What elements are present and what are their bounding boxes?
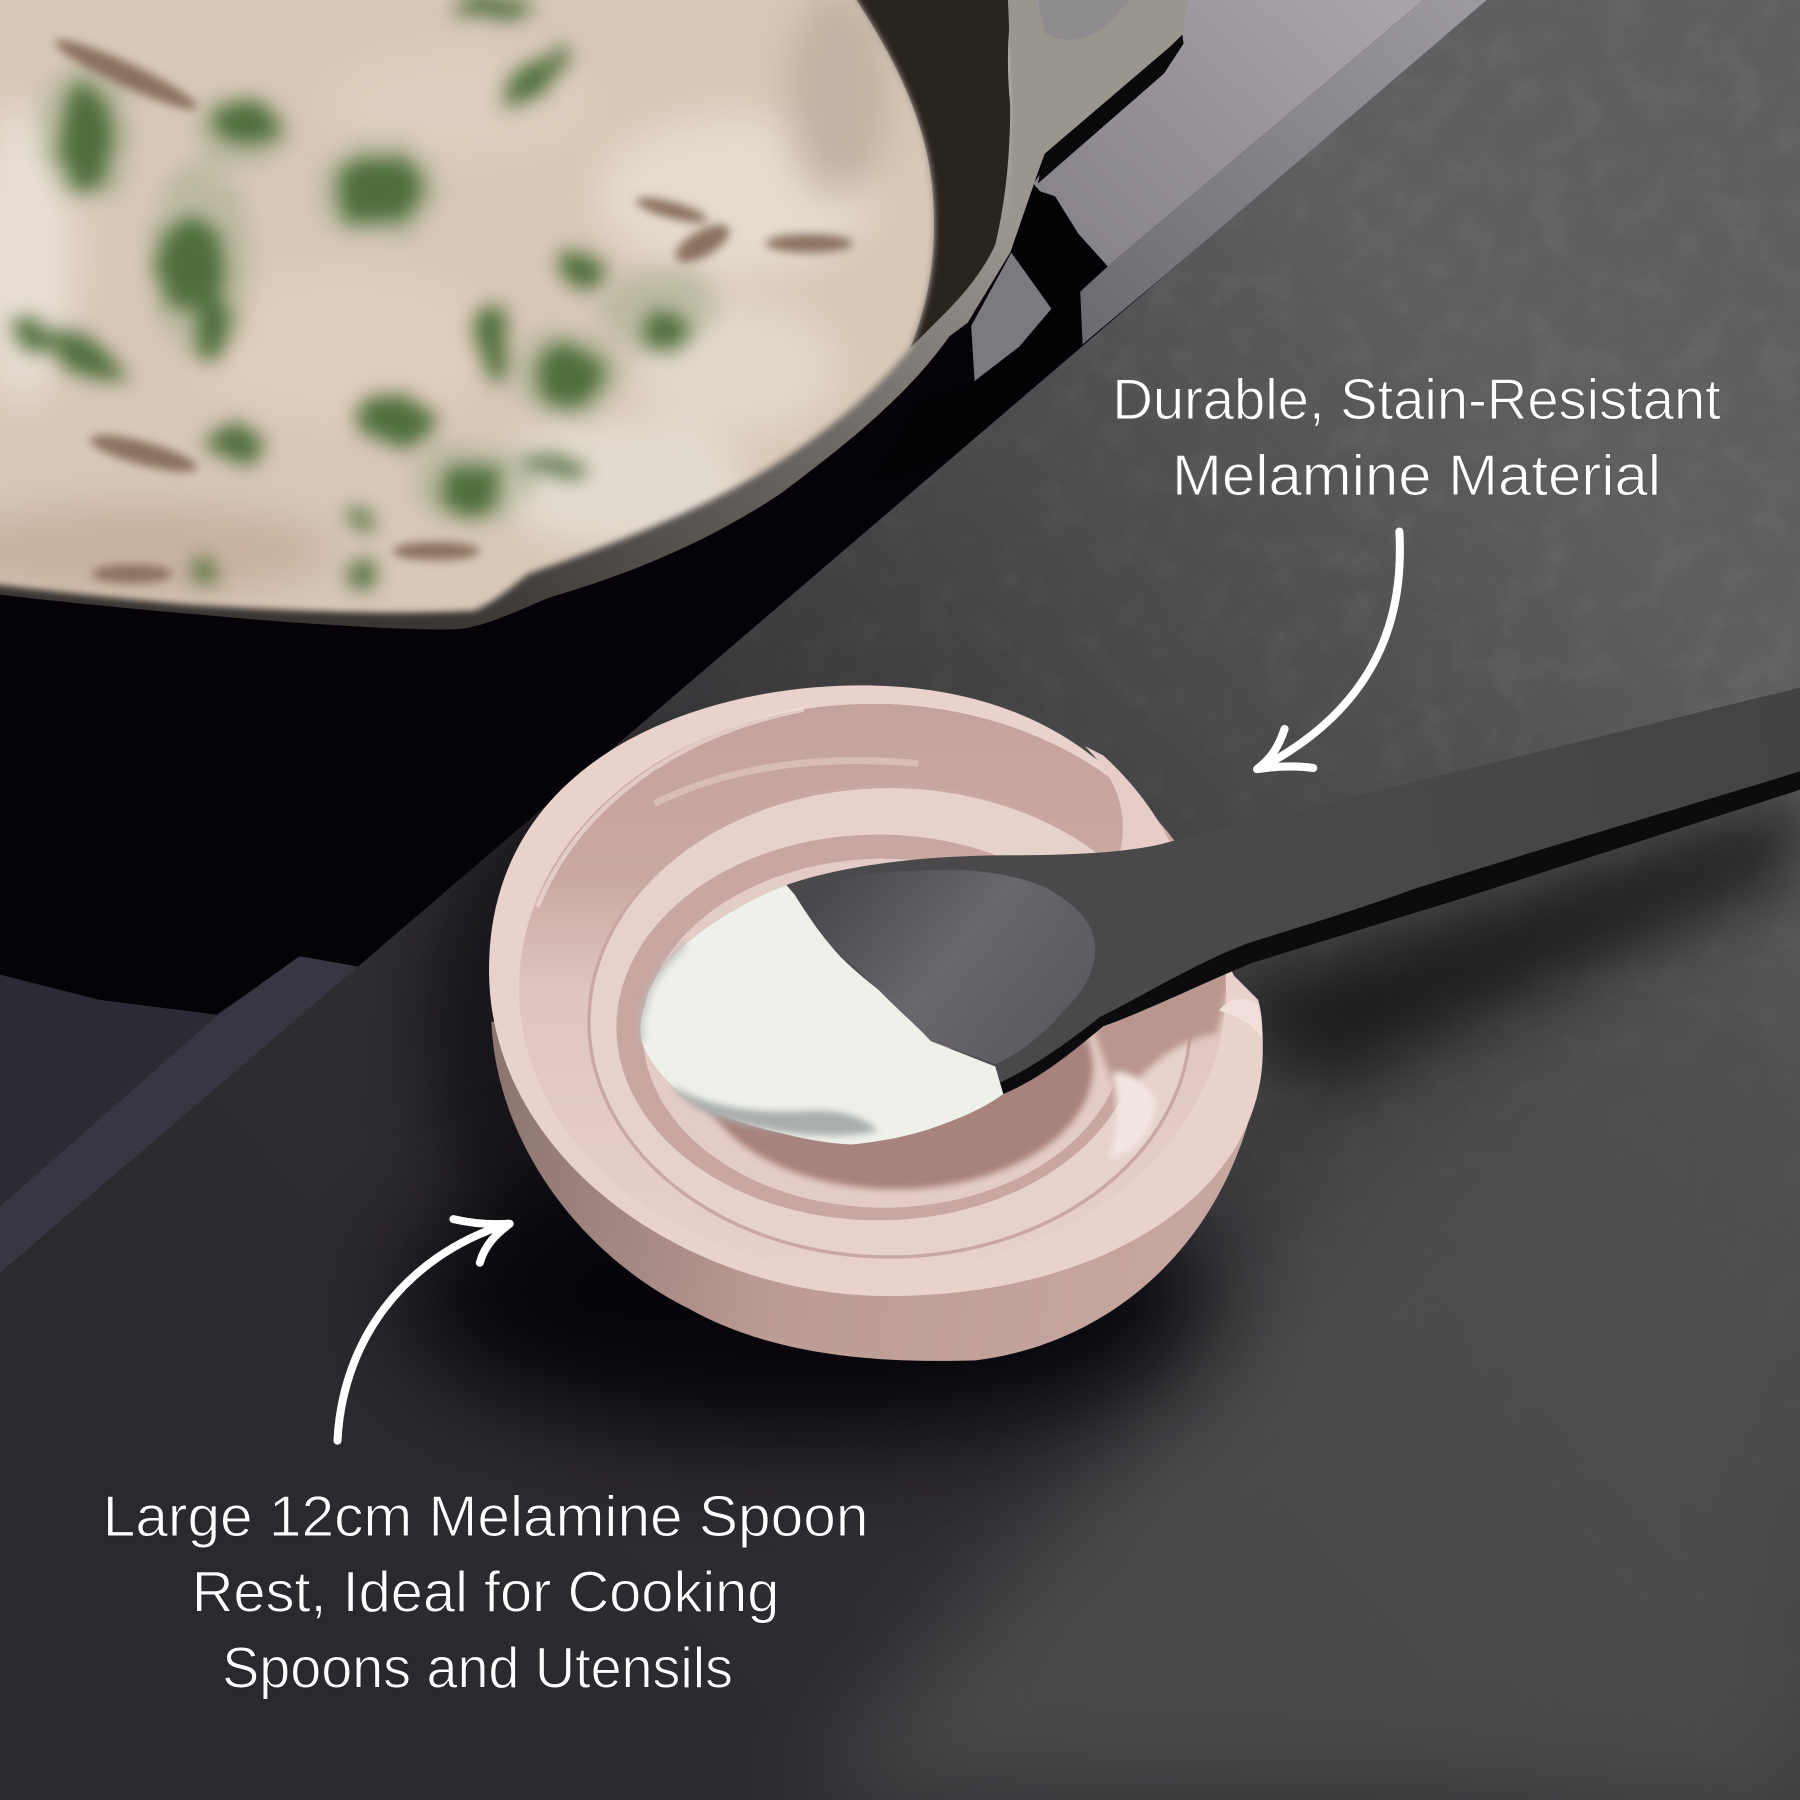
right inner shade xyxy=(1092,974,1226,1090)
cooktop glass upper right xyxy=(1033,0,1492,344)
dish shadow xyxy=(402,1154,1205,1441)
callout: large 12cm spoon rest xyxy=(103,1485,868,1700)
ring groove xyxy=(616,835,1140,1220)
spoon underside xyxy=(987,767,1800,1094)
spoon xyxy=(641,688,1800,1145)
spoon handle and bowl rim xyxy=(786,688,1800,1085)
spoon shadow xyxy=(1217,792,1800,1091)
callout: durable material xyxy=(1112,368,1721,508)
cooktop glass lower left xyxy=(0,956,358,1273)
pan handle xyxy=(1008,0,1188,253)
pan handle underside xyxy=(1038,34,1184,184)
arrow: to dish from top xyxy=(1257,532,1400,769)
dish rim xyxy=(489,685,1263,1296)
wall highlight streak xyxy=(654,761,918,804)
dish base xyxy=(491,1022,1260,1361)
label text: Large 12cm Melamine Spoon xyxy=(103,1485,868,1549)
sauce xyxy=(0,0,953,620)
pan rim xyxy=(0,0,1034,629)
label text: Durable, Stain-Resistant xyxy=(1112,368,1721,432)
ring one xyxy=(589,786,1190,1257)
ring two xyxy=(643,859,1125,1208)
cream left edge xyxy=(641,945,685,1041)
lower right tone xyxy=(837,1169,1788,1800)
pan inner wall xyxy=(856,0,1012,348)
spoon hollow xyxy=(794,870,1095,1064)
center well xyxy=(710,992,1097,1194)
cream shading xyxy=(672,1085,878,1135)
mushrooms xyxy=(51,31,853,583)
cream on spoon xyxy=(641,885,1003,1145)
callout: large 12cm spoon rest: Spoons and Utensils xyxy=(222,1637,733,1701)
callout: durable material: Melamine Material xyxy=(1172,444,1661,508)
herbs xyxy=(2,0,689,589)
arrow: to dish from bottom xyxy=(338,1219,510,1441)
pan handle hole xyxy=(1038,0,1130,40)
skillet with sauce xyxy=(0,0,1188,629)
dish left shadow xyxy=(410,741,626,1217)
cooktop glass seen through lug xyxy=(971,253,1052,381)
specular highlight right xyxy=(1108,1072,1156,1159)
callout: large 12cm spoon rest: Rest, Ideal for Cooking xyxy=(192,1561,779,1625)
pan lug handle xyxy=(872,189,1101,482)
herb halos xyxy=(38,63,717,522)
upper lip notch xyxy=(1085,746,1171,855)
right lip notch xyxy=(1219,999,1263,1039)
inner wall xyxy=(519,704,1224,1106)
spoon rest dish xyxy=(489,685,1263,1361)
specular highlight lower left xyxy=(562,1159,626,1234)
rim highlight xyxy=(537,709,804,907)
